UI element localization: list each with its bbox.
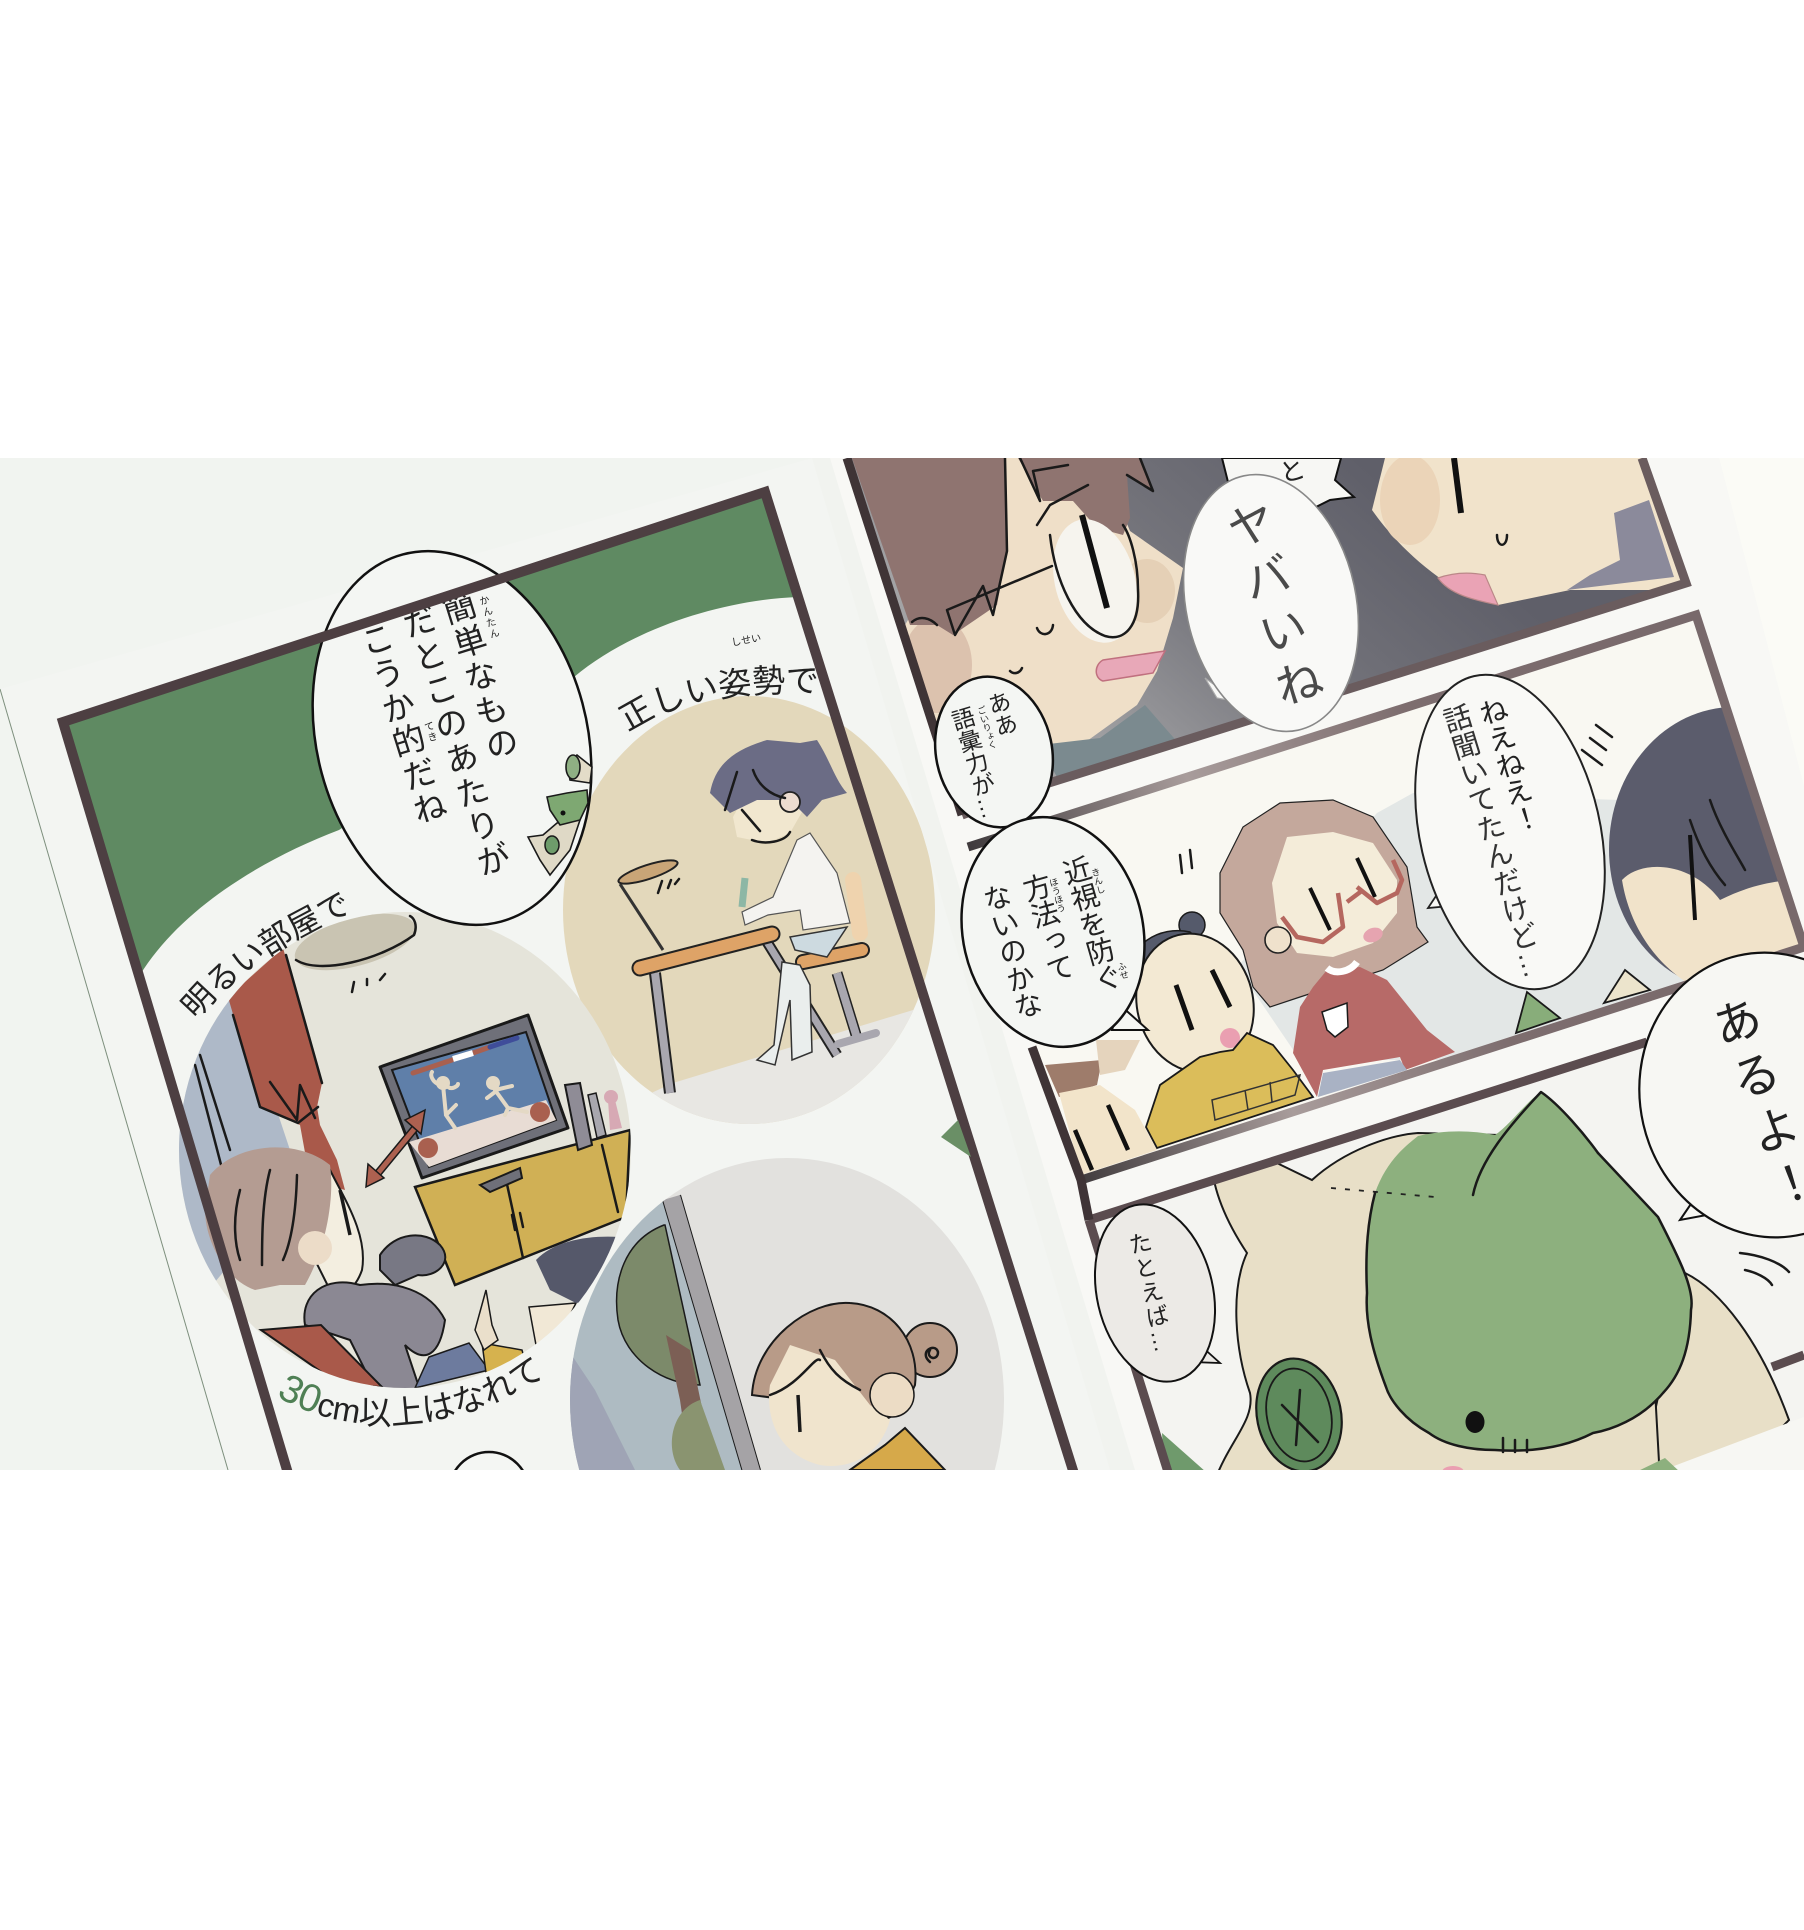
girl with bun <box>752 1303 957 1470</box>
panel: bright room circle <box>150 903 631 1395</box>
girl with controller <box>205 1147 489 1390</box>
bubble: are you listening <box>1386 656 1634 1008</box>
paper corner <box>1658 1417 1804 1480</box>
bubble: vocabulary: ああ <box>982 688 1020 740</box>
speaker and ornaments <box>565 1083 592 1150</box>
bubble: prevent myopia: ないのかな <box>977 880 1045 1023</box>
bubble: are you listening: 話聞いてたんだけど… <box>1437 700 1550 982</box>
right page left frame line <box>847 458 1089 1220</box>
panel 2 frame <box>968 615 1804 1180</box>
book photograph <box>0 458 1804 1470</box>
seated girl <box>710 740 850 1065</box>
bubble: prevent myopia <box>939 799 1167 1065</box>
label: correct posture: 正しい姿勢で <box>618 664 816 732</box>
bubble: yabai <box>1161 458 1381 748</box>
bubble: for example: たとえば… <box>1123 1229 1177 1357</box>
speech bubble: simple things: てき <box>421 720 439 745</box>
bubble: partial to... <box>1222 454 1354 515</box>
bubble: prevent myopia: きんし <box>1089 867 1106 895</box>
bubble: there is <box>1611 926 1804 1264</box>
television <box>380 1015 568 1192</box>
tree <box>617 1225 725 1470</box>
panel 3 frame <box>1089 1042 1647 1472</box>
panel: window circle <box>570 1158 1004 1470</box>
bubble: are you listening: ねえねえ！ <box>1473 693 1544 836</box>
speech bubble: simple things: こうか的だね <box>352 618 450 831</box>
bubble: vocabulary <box>921 666 1067 838</box>
tongue <box>1096 651 1165 681</box>
cat ears <box>1516 992 1560 1033</box>
boy in profile, right <box>1609 707 1804 991</box>
right character face <box>1372 458 1690 605</box>
girl in yellow hood <box>1122 912 1313 1148</box>
left page frame <box>63 492 1076 1480</box>
table lamp <box>616 856 680 950</box>
panel: cat closeup <box>1080 1000 1804 1480</box>
cat body <box>1162 1092 1804 1480</box>
red curtain <box>228 948 345 1190</box>
panel: group conversation <box>960 610 1804 1190</box>
bubble: yabai: ヤバいね <box>1215 495 1330 721</box>
small bubble at bottom <box>454 1450 524 1470</box>
speech bubble: simple things: だとこのあたりが <box>394 600 514 883</box>
panel: correct posture circle <box>563 696 935 1124</box>
speech bubble: simple things <box>311 550 593 926</box>
ruby: posture: しせい <box>730 632 762 649</box>
speech bubble: simple things: 簡単なもの <box>434 586 523 767</box>
left character face <box>852 458 1183 783</box>
glasses and eye <box>912 458 1153 673</box>
speech bubble: simple things: かんたん <box>476 594 501 642</box>
distance arrow <box>366 1110 425 1187</box>
ceiling light <box>294 914 417 994</box>
chair <box>803 880 876 1044</box>
desk <box>640 934 837 1093</box>
bubble: partial to...: と… <box>1273 454 1315 512</box>
bubble: prevent myopia: 方法って <box>1017 869 1078 986</box>
green background band <box>62 492 798 975</box>
pointing boy <box>474 1236 616 1372</box>
peeking cat <box>528 755 592 875</box>
bubble: vocabulary: 語彙力が… <box>946 704 1005 822</box>
green leaf shape at page edge <box>941 1120 971 1157</box>
nose <box>1442 1466 1464 1478</box>
bubble: prevent myopia: ふせ <box>1115 961 1130 981</box>
TV cabinet <box>415 1130 630 1285</box>
left page <box>0 486 1078 1470</box>
bubble: vocabulary: ごいりょく <box>975 704 998 750</box>
panel 1 frame <box>962 458 1686 815</box>
green head patch <box>1366 1092 1692 1451</box>
bubble: for example <box>1078 1192 1232 1394</box>
label: 30cm distance: 30cm以上はなれて <box>280 1356 540 1428</box>
panel: two big faces <box>830 455 1690 815</box>
label: bright room: 明るい部屋で <box>179 892 346 1016</box>
eye <box>1466 1411 1484 1433</box>
bubble: prevent myopia: ほうほう <box>1047 877 1067 914</box>
bubble: prevent myopia: 近視を防ぐ <box>1057 852 1125 996</box>
right page <box>812 454 1804 1480</box>
button eye <box>1246 1351 1352 1479</box>
stitches <box>1331 1188 1435 1197</box>
glasses girl <box>1220 800 1455 1097</box>
boy at lower left <box>1045 1040 1157 1175</box>
